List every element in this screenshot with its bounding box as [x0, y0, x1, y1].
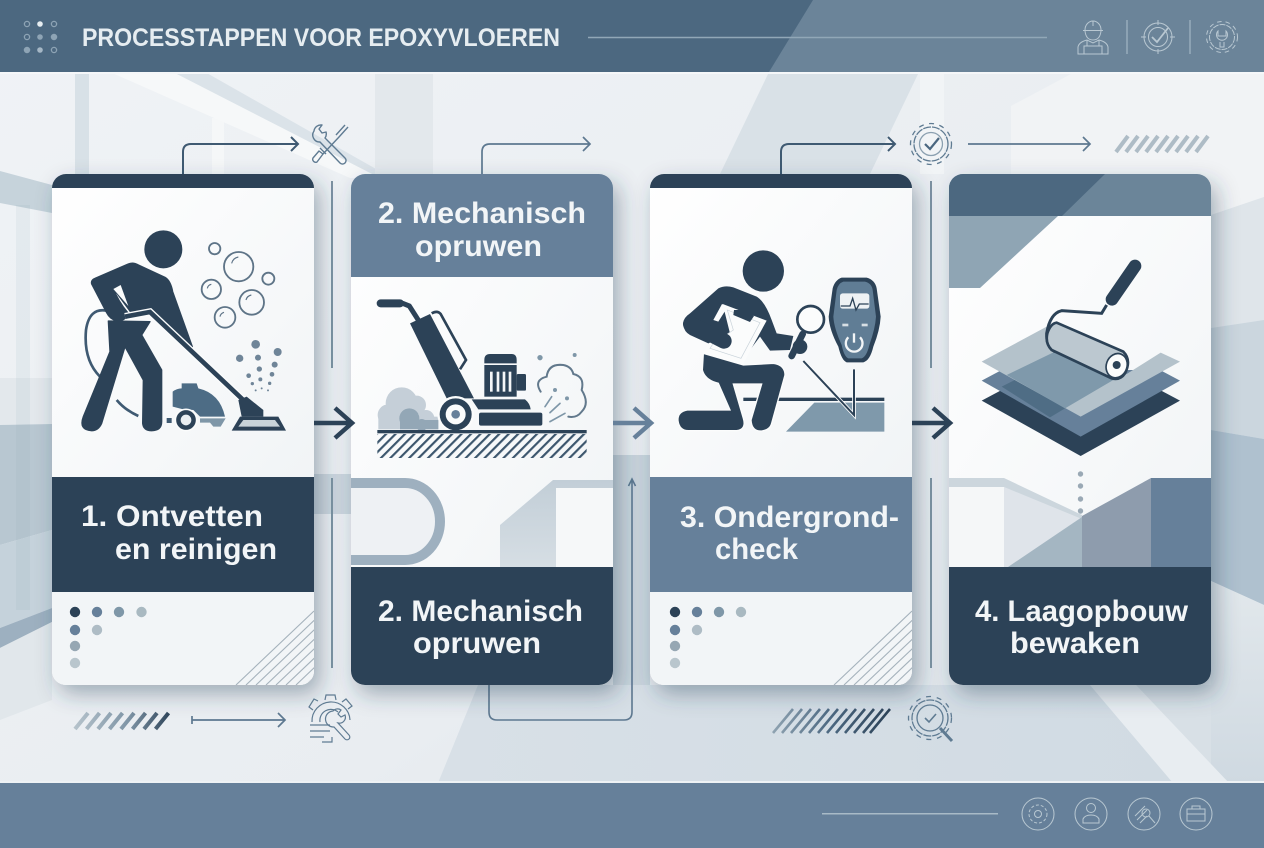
connector: top arrow from card 2	[482, 137, 590, 174]
icon: inspector with moisture meter	[678, 250, 884, 432]
droplets	[236, 340, 282, 391]
bubbles	[202, 243, 274, 328]
floor and hatch	[377, 430, 587, 458]
torso	[683, 286, 793, 363]
icon: floor grinder	[377, 303, 587, 458]
label band: step 1: en reinigen	[115, 533, 277, 566]
panel: step 3	[650, 174, 982, 685]
dots under layers	[1078, 471, 1083, 514]
meter	[829, 278, 881, 362]
top decorative band	[949, 174, 1211, 288]
legs	[678, 353, 785, 431]
check line	[803, 361, 854, 415]
footer icon: gear	[1022, 798, 1054, 830]
label band: step 2 bottom: 2. Mechanisch	[378, 595, 583, 628]
label band: step 2 top: opruwen	[415, 230, 542, 263]
header bar	[0, 0, 1264, 74]
hatch: top right	[1116, 136, 1208, 152]
label band: step 3	[650, 477, 912, 592]
label band: step 3: check	[715, 533, 798, 566]
connector: top arrow from card 1	[183, 137, 298, 174]
arrow: step 1 to 2	[314, 408, 352, 438]
panel: step 2	[351, 174, 613, 685]
label band: step 2 top: 2. Mechanisch	[378, 197, 586, 230]
hatch: bottom left	[75, 713, 168, 729]
label band: step 2 bottom: opruwen	[413, 627, 541, 660]
dot grid icon	[24, 21, 57, 53]
lower decorative blocks	[949, 478, 1211, 567]
dot cluster	[70, 607, 147, 668]
clipboard	[703, 304, 767, 365]
label band: step 2 bottom	[351, 567, 613, 685]
hatch: bottom right	[773, 709, 890, 733]
panel: step 4	[949, 174, 1211, 685]
decorative stadium ring	[351, 483, 440, 560]
icon: crossed tools	[313, 125, 348, 164]
decorative block	[500, 480, 613, 567]
icon: target check	[1141, 20, 1175, 54]
arrow: bottom left	[192, 713, 285, 727]
connector: loop from card 2 to card 3	[489, 479, 636, 720]
icon: gear wrench	[1206, 22, 1238, 52]
icon: roller over layers	[982, 266, 1180, 456]
icon: worker	[1078, 21, 1108, 54]
floor	[743, 398, 884, 401]
divider lines between cards	[332, 181, 931, 668]
dot cluster	[670, 607, 746, 668]
magnifier	[792, 334, 803, 356]
footer icon: toolbox	[1180, 798, 1212, 830]
dust right	[538, 365, 586, 422]
footer icon: tools	[1128, 798, 1160, 830]
label band: step 1: 1. Ontvetten	[81, 500, 263, 533]
label band: step 1	[52, 477, 314, 592]
icon: gear with check	[910, 124, 952, 164]
icon: worker cleaning floor	[82, 230, 286, 431]
corner hatch	[834, 610, 912, 685]
connector: top arrow to hatch	[968, 137, 1090, 151]
connector: top arrow from card 3	[781, 137, 895, 174]
label band: step 3: 3. Ondergrond-	[680, 501, 899, 534]
dust left	[378, 387, 438, 429]
label band: step 4	[949, 567, 1211, 685]
title: PROCESSTAPPEN VOOR EPOXYVLOEREN	[82, 24, 560, 52]
label band: step 2 top	[351, 174, 613, 277]
arrow: step 3 to 4	[912, 408, 950, 438]
label band: step 4: bewaken	[1010, 627, 1140, 660]
icon: gear with magnifier check	[908, 696, 952, 741]
arrow: step 2 to 3	[613, 408, 651, 438]
icon: gear with wrench	[309, 695, 352, 742]
footer bar	[0, 781, 1264, 848]
footer icon: worker	[1075, 798, 1107, 830]
panel: step 1	[52, 174, 384, 685]
label band: step 4: 4. Laagopbouw	[975, 595, 1189, 628]
corner hatch	[236, 610, 314, 685]
